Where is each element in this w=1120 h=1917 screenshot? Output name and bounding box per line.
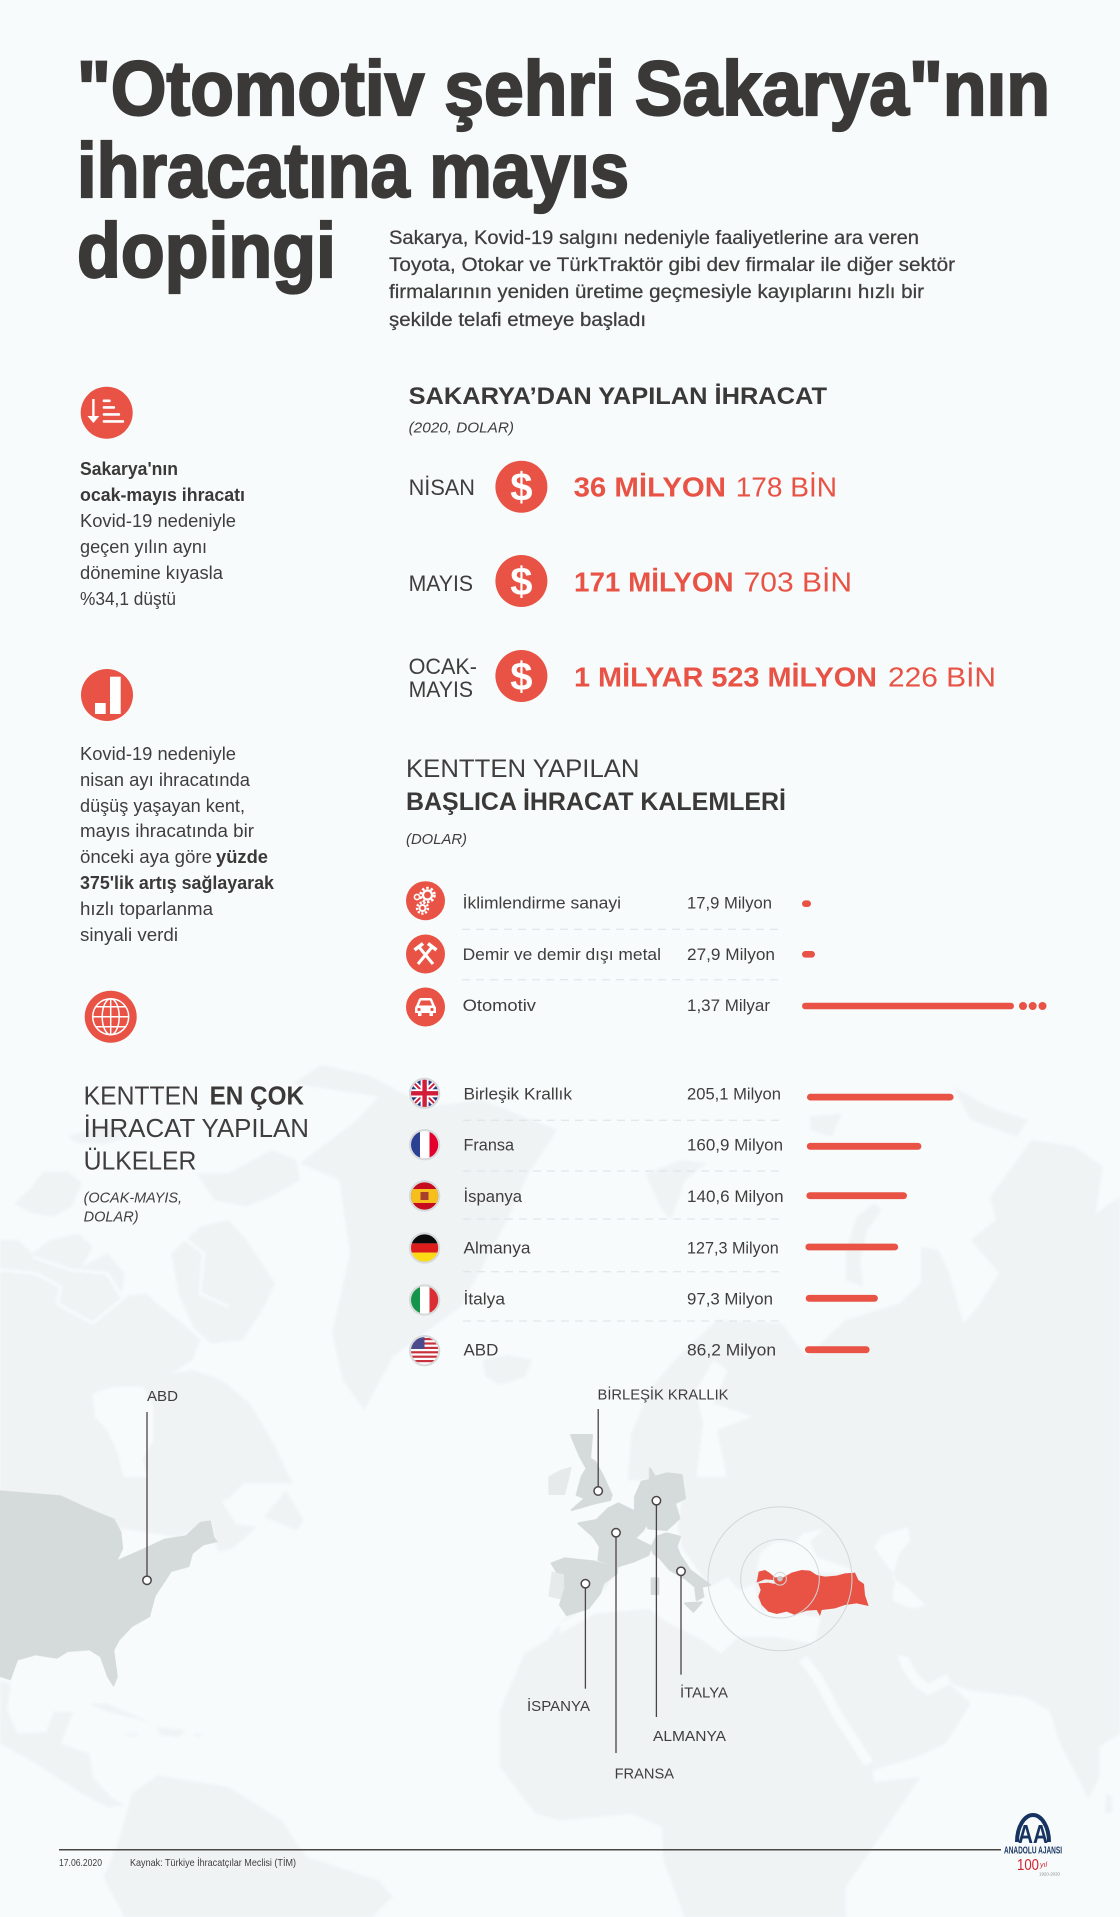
icon: globe bbox=[85, 991, 137, 1043]
map marker: almanya bbox=[652, 1496, 726, 1745]
row: iklimlendirme bbox=[406, 881, 811, 920]
row: otomotiv: 1,37 Milyar bbox=[687, 996, 770, 1015]
text block: ocak-mayıs export: %34,1 düştü bbox=[80, 589, 176, 609]
heading: exports from Sakarya: SAKARYA’DAN YAPILAN İHRACAT bbox=[409, 383, 827, 410]
row: iklimlendirme: İklimlendirme sanayi bbox=[463, 894, 621, 913]
row: demir bbox=[406, 934, 815, 974]
row: abd: ABD bbox=[464, 1341, 498, 1360]
text block: mayıs recovery: 375'lik artış sağlayarak bbox=[80, 873, 275, 893]
text block: ocak-mayıs export bbox=[80, 459, 245, 609]
logo: anadolu ajansı bbox=[1004, 1815, 1062, 1876]
text block: ocak-mayıs export: Sakarya'nın bbox=[80, 459, 178, 479]
text block: ocak-mayıs export: ocak-mayıs ihracatı bbox=[80, 485, 245, 505]
row: birleşik krallık bbox=[409, 1078, 954, 1109]
row: ocak-mayıs: 226 BİN bbox=[888, 662, 996, 693]
subtitle text: firmalarının yeniden üretime geçmesiyle kayıplarını hızlı bir bbox=[389, 282, 925, 303]
heading: most exported countries: ÜLKELER bbox=[84, 1146, 196, 1176]
usa bbox=[0, 1490, 218, 1687]
subtitle text: Toyota, Otokar ve TürkTraktör gibi dev firmalar ile diğer sektör bbox=[389, 255, 956, 276]
footer rule bbox=[59, 1849, 1001, 1851]
row: mayıs: 171 MİLYON bbox=[574, 566, 734, 597]
map marker: italya bbox=[677, 1567, 728, 1702]
row: nisan: 36 MİLYON bbox=[574, 472, 726, 503]
subtitle text: Sakarya, Kovid-19 salgını nedeniyle faaliyetlerine ara veren bbox=[389, 228, 919, 249]
row: ocak-mayıs: MAYIS bbox=[409, 677, 473, 702]
row: fransa: 160,9 Milyon bbox=[687, 1136, 783, 1155]
logo: anadolu ajansı: AA bbox=[1018, 1819, 1048, 1849]
world map background bbox=[0, 1065, 1120, 1917]
heading: main export items: BAŞLICA İHRACAT KALEMLERİ bbox=[406, 788, 786, 816]
title: ihracatına mayıs bbox=[77, 128, 629, 214]
text block: mayıs recovery: hızlı toparlanma bbox=[80, 899, 214, 919]
heading: most exported countries: DOLAR) bbox=[84, 1208, 139, 1225]
title bbox=[77, 46, 1050, 294]
row: nisan: 178 BİN bbox=[736, 472, 837, 503]
map marker: ispanya: İSPANYA bbox=[527, 1697, 590, 1715]
text block: mayıs recovery bbox=[80, 744, 275, 945]
text block: mayıs recovery: önceki aya göre bbox=[80, 847, 212, 867]
heading: exports from Sakarya bbox=[409, 383, 827, 437]
europe countries bbox=[548, 1435, 710, 1615]
row: fransa bbox=[409, 1129, 921, 1160]
row: nisan bbox=[409, 461, 837, 513]
heading: most exported countries: İHRACAT YAPILAN bbox=[84, 1113, 309, 1143]
row: ispanya bbox=[409, 1180, 907, 1212]
map marker: fransa: FRANSA bbox=[615, 1765, 674, 1782]
map marker: italya: İTALYA bbox=[680, 1684, 728, 1702]
map marker: abd: ABD bbox=[147, 1388, 178, 1405]
row: italya: 97,3 Milyon bbox=[687, 1290, 773, 1309]
heading: most exported countries: (OCAK-MAYIS, bbox=[84, 1190, 182, 1207]
logo: anadolu ajansı: yıl bbox=[1039, 1862, 1047, 1869]
heading: most exported countries: EN ÇOK bbox=[210, 1080, 304, 1110]
map: turkey bbox=[708, 1507, 869, 1651]
row: ispanya: 140,6 Milyon bbox=[687, 1187, 784, 1206]
logo: anadolu ajansı: 100 bbox=[1017, 1857, 1039, 1874]
map marker: almanya: ALMANYA bbox=[653, 1728, 726, 1745]
text block: mayıs recovery: mayıs ihracatında bir bbox=[80, 821, 254, 841]
row: ispanya: İspanya bbox=[464, 1187, 523, 1206]
row: mayıs: $ bbox=[510, 560, 533, 604]
subtitle text: şekilde telafi etmeye başladı bbox=[389, 310, 646, 331]
heading: exports from Sakarya: (2020, DOLAR) bbox=[409, 420, 514, 437]
row: almanya: Almanya bbox=[464, 1238, 531, 1257]
logo: anadolu ajansı: ANADOLU AJANSI bbox=[1004, 1845, 1062, 1857]
map marker: abd bbox=[143, 1388, 178, 1585]
row: abd bbox=[409, 1335, 870, 1366]
row: demir: Demir ve demir dışı metal bbox=[463, 945, 661, 964]
row: nisan: NİSAN bbox=[409, 475, 475, 500]
row: almanya bbox=[409, 1232, 898, 1264]
icon: descending list bbox=[81, 387, 133, 439]
row: italya: İtalya bbox=[464, 1290, 506, 1309]
map marker: birleşik krallık bbox=[594, 1385, 728, 1495]
title: dopingi bbox=[77, 208, 336, 294]
heading: most exported countries: KENTTEN bbox=[84, 1080, 199, 1110]
text block: mayıs recovery: Kovid-19 nedeniyle bbox=[80, 744, 236, 764]
title: "Otomotiv şehri Sakarya"nın bbox=[77, 46, 1050, 132]
map marker: ispanya bbox=[527, 1580, 590, 1715]
text block: ocak-mayıs export: geçen yılın aynı bbox=[80, 537, 207, 557]
row: birleşik krallık: Birleşik Krallık bbox=[464, 1084, 572, 1103]
row: otomotiv: Otomotiv bbox=[463, 996, 537, 1015]
row: nisan: $ bbox=[510, 466, 533, 510]
icon: rising bars bbox=[81, 669, 133, 721]
footer date: 17.06.2020 bbox=[59, 1857, 102, 1869]
map marker: fransa bbox=[612, 1528, 674, 1782]
row: mayıs: MAYIS bbox=[409, 571, 473, 596]
heading: main export items: KENTTEN YAPILAN bbox=[406, 755, 640, 783]
row: italya bbox=[409, 1284, 878, 1316]
heading: most exported countries bbox=[84, 1080, 309, 1225]
row: mayıs bbox=[409, 555, 852, 607]
row: otomotiv bbox=[406, 988, 1046, 1026]
text block: ocak-mayıs export: dönemine kıyasla bbox=[80, 563, 224, 583]
heading: main export items: (DOLAR) bbox=[406, 832, 467, 848]
text block: mayıs recovery: nisan ayı ihracatında bbox=[80, 770, 251, 790]
text block: mayıs recovery: yüzde bbox=[216, 847, 268, 867]
row: abd: 86,2 Milyon bbox=[687, 1341, 776, 1360]
text block: mayıs recovery: düşüş yaşayan kent, bbox=[80, 796, 245, 816]
highlighted countries map bbox=[0, 1435, 710, 1687]
row: mayıs: 703 BİN bbox=[744, 566, 852, 597]
row: iklimlendirme: 17,9 Milyon bbox=[687, 894, 772, 913]
row: almanya: 127,3 Milyon bbox=[687, 1238, 779, 1257]
row: ocak-mayıs bbox=[409, 650, 996, 702]
logo: anadolu ajansı: 1920-2020 bbox=[1039, 1872, 1060, 1876]
row: fransa: Fransa bbox=[464, 1136, 515, 1155]
row: ocak-mayıs: OCAK- bbox=[409, 654, 477, 679]
subtitle text bbox=[389, 228, 956, 331]
footer source: Kaynak: Türkiye İhracatçılar Meclisi (TİM) bbox=[130, 1856, 296, 1869]
map marker: birleşik krallık: BİRLEŞİK KRALLIK bbox=[598, 1385, 728, 1403]
text block: ocak-mayıs export: Kovid-19 nedeniyle bbox=[80, 511, 236, 531]
heading: main export items bbox=[406, 755, 786, 848]
row: ocak-mayıs: $ bbox=[510, 655, 533, 699]
row: demir: 27,9 Milyon bbox=[687, 945, 775, 964]
row: birleşik krallık: 205,1 Milyon bbox=[687, 1084, 781, 1103]
text block: mayıs recovery: sinyali verdi bbox=[80, 925, 178, 945]
row: ocak-mayıs: 1 MİLYAR 523 MİLYON bbox=[574, 662, 877, 693]
